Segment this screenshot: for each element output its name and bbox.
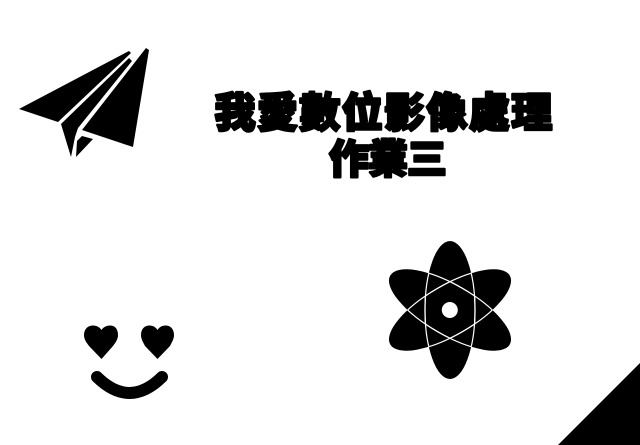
title: 作業三: [329, 138, 447, 182]
icon: atom: [388, 241, 512, 379]
icon: right heart eye: [141, 326, 174, 359]
icon: smile: [97, 377, 162, 393]
corner triangle: [558, 363, 640, 445]
title: [214, 90, 552, 182]
icon: left heart eye: [84, 326, 118, 359]
icon: paper plane: [19, 48, 149, 157]
icon: smiling face with heart eyes: [84, 326, 174, 393]
title: 我愛數位影像處理: [214, 90, 552, 136]
